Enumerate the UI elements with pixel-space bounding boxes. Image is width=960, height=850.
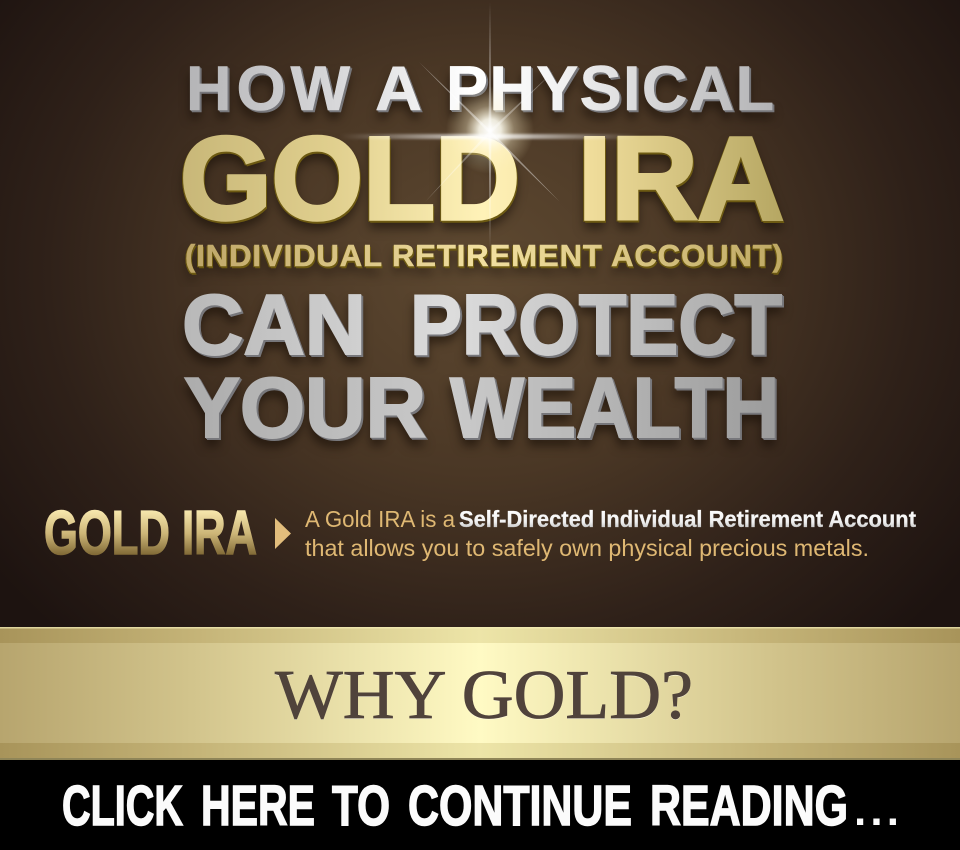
title line: your wealth: WEALTH [450,361,779,456]
title line: can protect: CAN [182,278,366,373]
background [0,0,960,630]
call to action text [62,774,899,838]
banner: why gold [0,627,960,760]
title line: how a physical: PHYSICAL [446,54,774,124]
call to action text: CLICK [62,774,183,838]
definition text: A Gold IRA is a [305,506,455,532]
banner heading: WHY GOLD? [275,658,693,735]
title line: gold ira [180,113,784,245]
title line: your wealth [184,361,779,456]
call to action text: HERE [201,774,315,838]
definition text: Self-Directed Individual Retirement Account [459,506,916,532]
call to action bar [0,761,960,850]
title line: how a physical: HOW [186,54,351,124]
title line: can protect: PROTECT [410,278,782,373]
title line: how a physical [186,54,774,124]
label: gold ira: GOLD IRA [44,499,257,568]
call to action text: CONTINUE [408,774,632,838]
banner heading: WHY GOLD? [275,657,693,734]
title line: individual retirement account: (INDIVIDUAL RETIREMENT ACCOUNT) [185,238,783,273]
title line: how a physical: A [375,54,422,124]
call to action text: TO [332,774,390,838]
title line: gold ira: IRA [578,113,784,245]
definition text [305,506,916,561]
icon: arrow [275,518,291,549]
title line: gold ira: GOLD [180,113,520,245]
title line: your wealth: YOUR [184,361,426,456]
call to action text: READING [650,774,848,838]
icon: star sparkle [340,2,640,250]
definition text: that allows you to safely own physical precious metals. [305,535,869,561]
call to action text: ... [854,786,899,835]
title line: can protect [182,278,782,373]
